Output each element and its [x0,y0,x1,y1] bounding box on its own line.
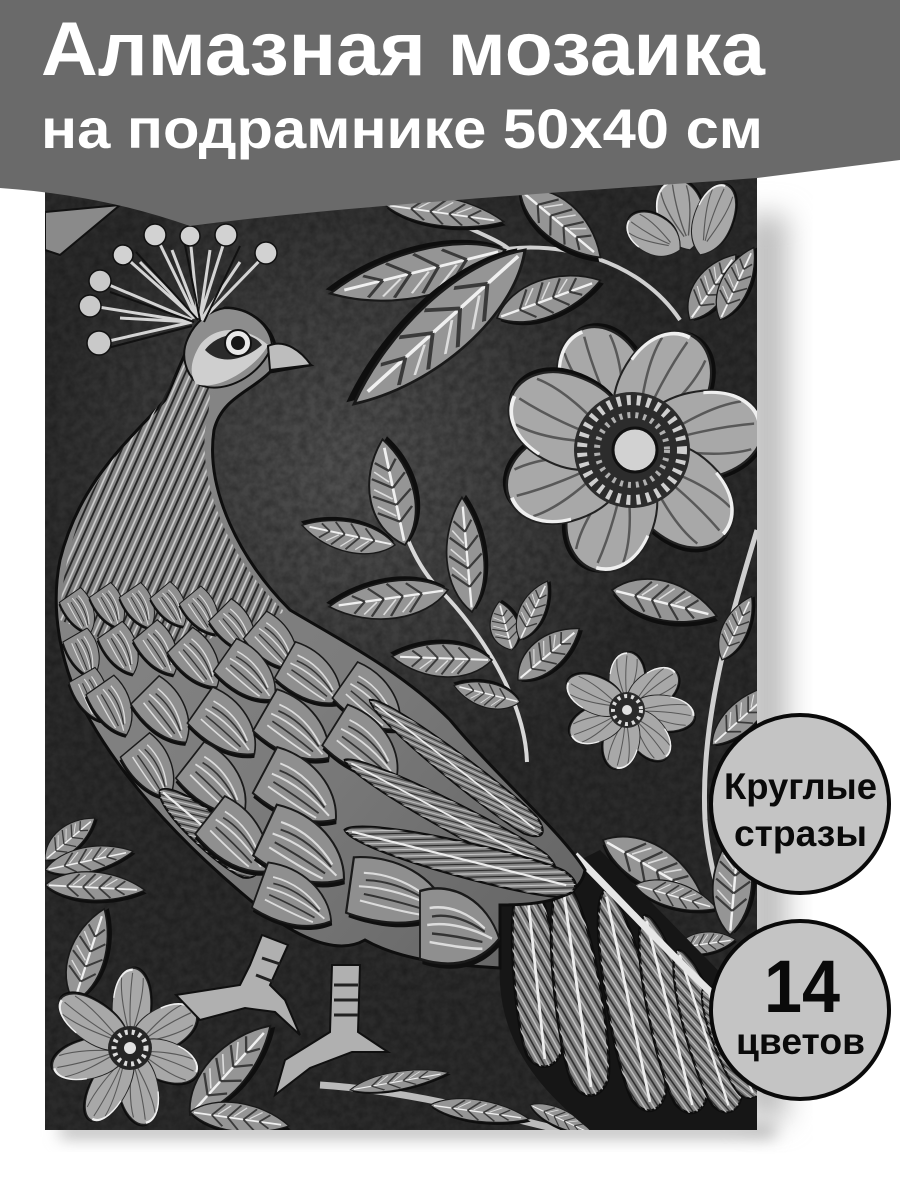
right foliage [602,529,757,956]
badge: round rhinestones: Круглые [724,766,877,807]
canvas bottom shadow [60,1124,775,1138]
title: Алмазная мозаика [41,7,766,92]
badge: round rhinestones: стразы [734,813,867,854]
badge: 14 colours: цветов [736,1021,865,1062]
picture: embossed silver peacock [36,172,791,1144]
picture background [45,178,757,1130]
canvas soft shadow [745,215,787,1120]
bottom-left foliage and flower [45,818,290,1130]
beak [268,344,311,370]
peacock crown [79,224,277,355]
peacock legs and feet [176,935,388,1095]
badge: 14 colours: 14 [764,945,840,1028]
middle branch [297,432,592,762]
badge: 14 colours [711,921,889,1099]
badge: round rhinestones [711,715,889,893]
top foliage [45,183,757,406]
bottom branch [320,1070,590,1130]
header banner [0,0,900,226]
wing feather scales [56,581,580,969]
peacock head [184,308,311,388]
neck texture [60,340,285,660]
subtitle: на подрамнике 50х40 см [41,97,763,160]
eye [225,330,251,356]
large flower [502,323,757,573]
small flower [558,651,698,773]
peacock tail [500,850,770,1130]
peacock body [56,308,585,969]
